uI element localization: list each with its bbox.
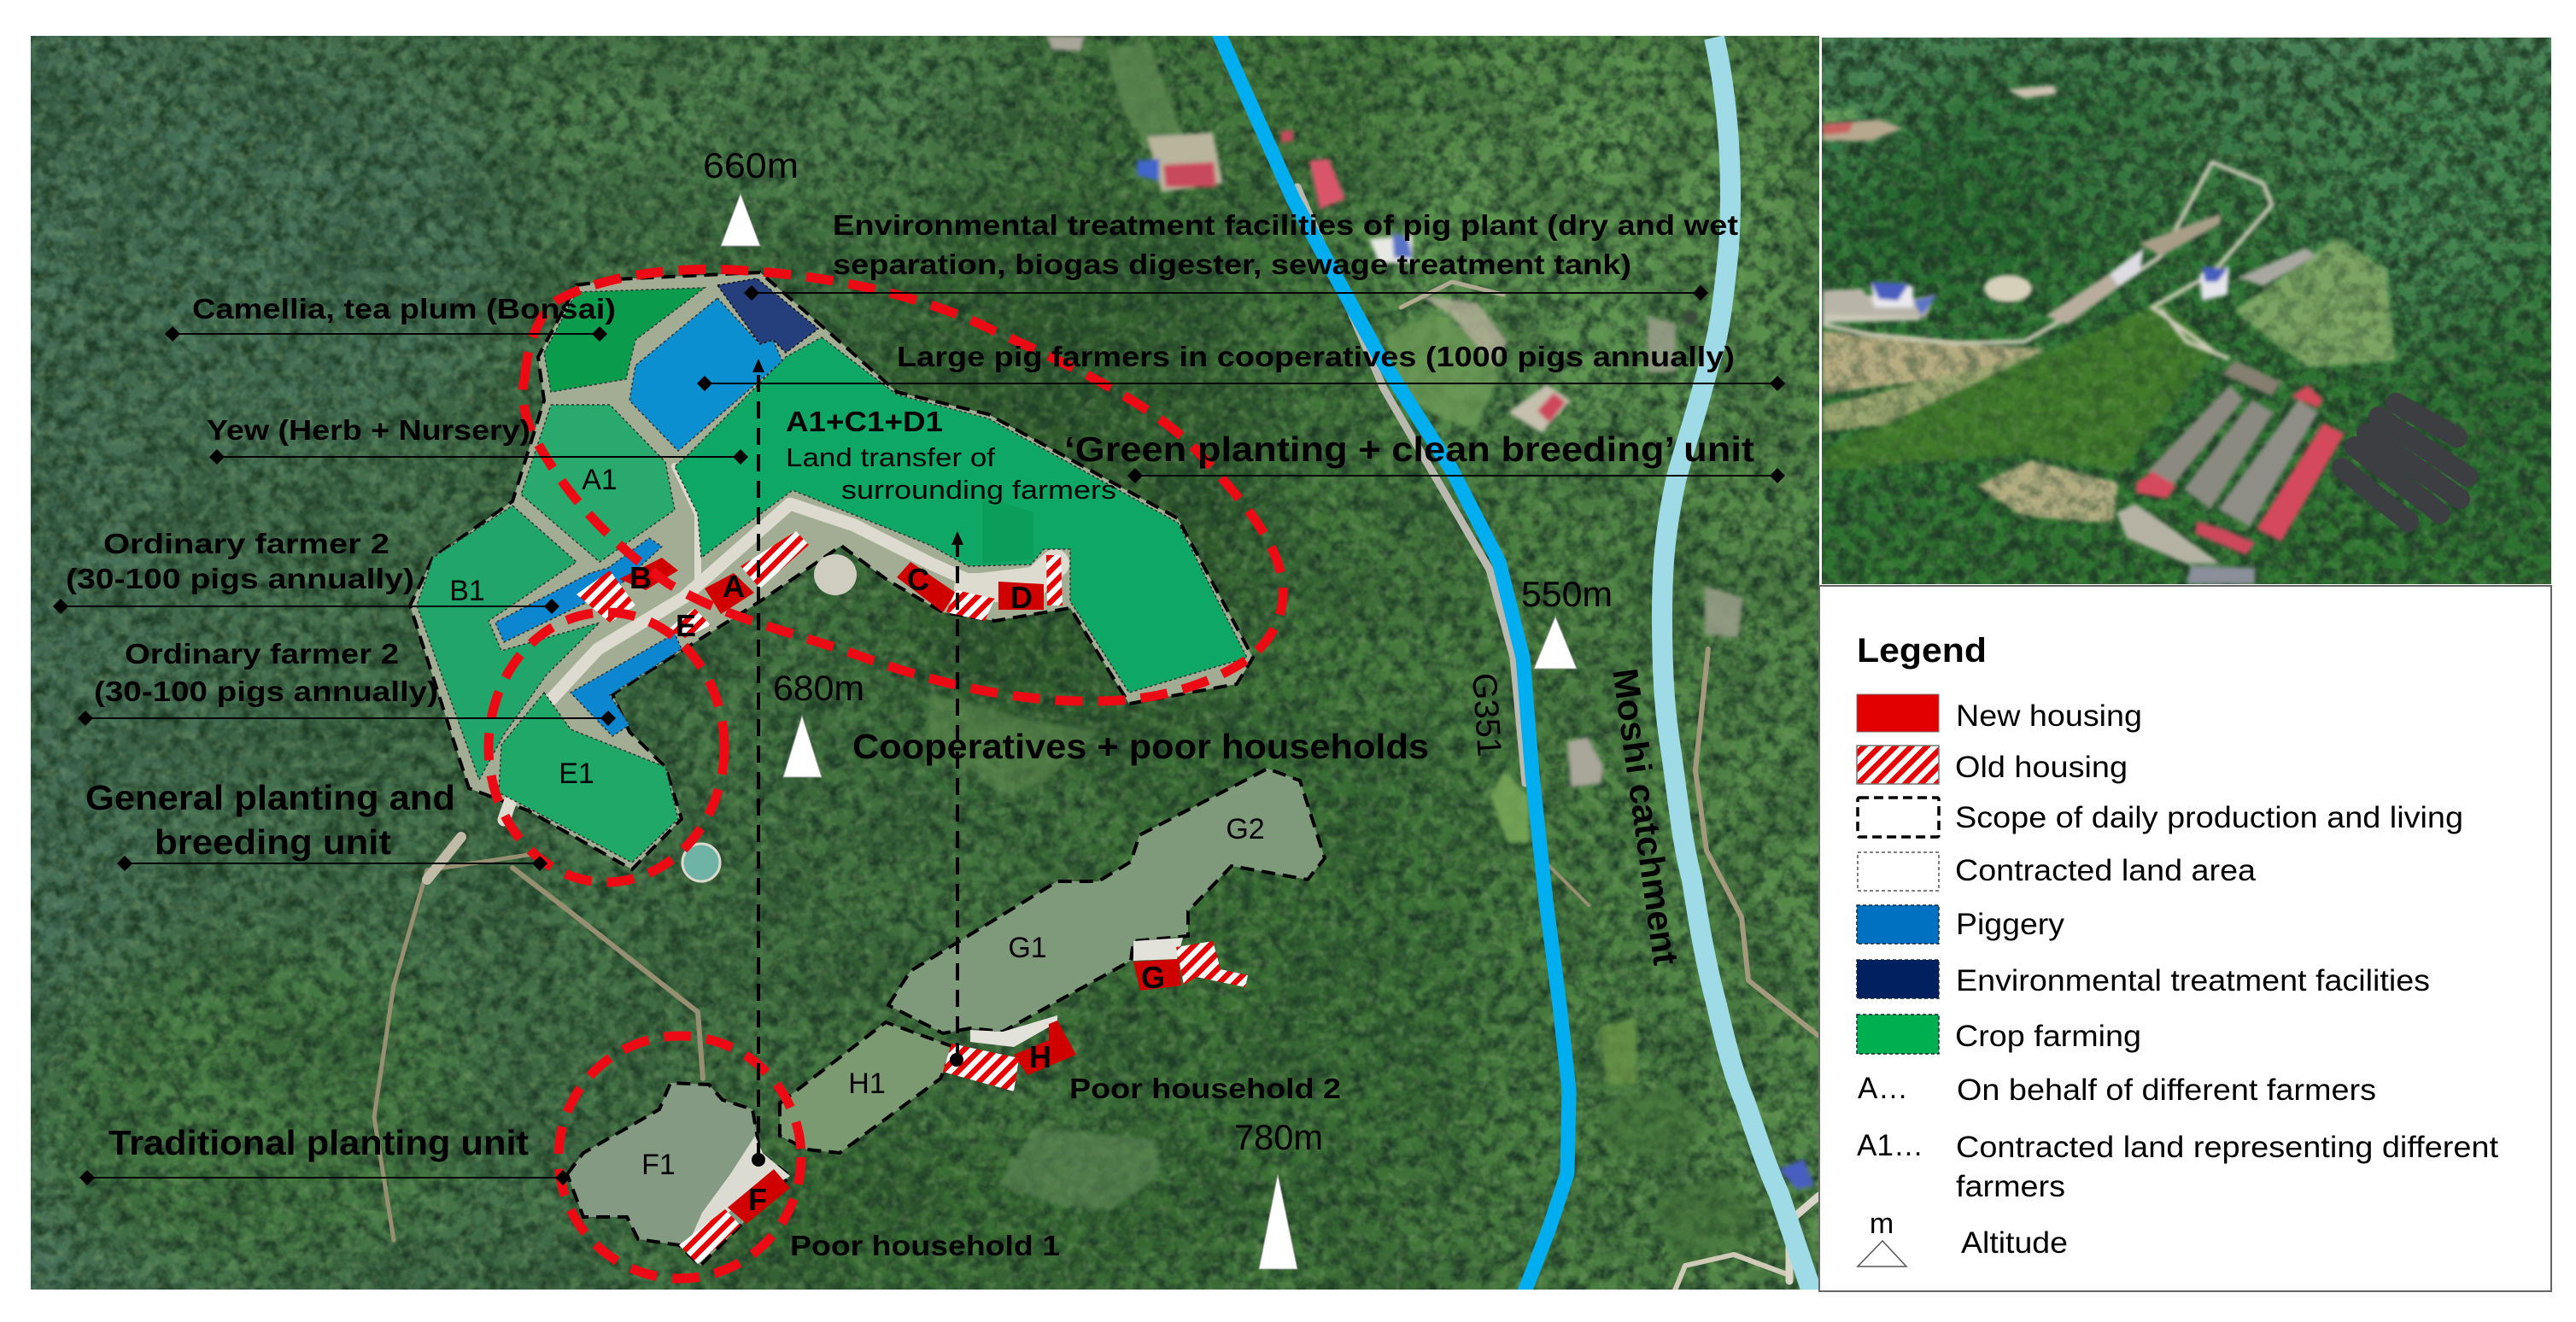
panel: legend [1819, 586, 2551, 1291]
old housing: C [946, 590, 995, 621]
altitude marker: 660m: 660m [703, 145, 799, 185]
field: camellia, tea plum [544, 288, 705, 392]
label: environmental treatment facilities [833, 209, 1738, 280]
photo fields [1823, 109, 2396, 522]
altitude marker: 780m [1234, 1117, 1323, 1269]
leader lines with diamond ends [53, 285, 1785, 1185]
label: ordinary farmer 2: Ordinary farmer 2 [125, 638, 399, 670]
heading: traditional planting unit: Traditional planting unit [108, 1123, 529, 1162]
farmer letters on housing: G [1141, 960, 1165, 995]
Moshi catchment stream [1662, 38, 1812, 1294]
scope and land: tea fields G1 G2 [888, 769, 1325, 1033]
altitude marker: 550m [1521, 574, 1613, 669]
farmer letters on housing [629, 560, 1165, 1217]
label: A1+C1+D1 land transfer: A1+C1+D1 [786, 406, 943, 437]
yard beside G [1133, 938, 1183, 961]
altitude marker: 680m [773, 668, 864, 777]
farmer letters on housing: A [723, 569, 745, 604]
contracted land codes: G1 [1008, 932, 1047, 964]
label: A1+C1+D1 land transfer [786, 406, 1116, 505]
legend item: contracted land code: farmers [1956, 1170, 2065, 1203]
label: environmental treatment facilities: separation, biogas digester, sewage treatment tank) [833, 249, 1631, 280]
forest background [31, 26, 1819, 1290]
farmer letters on housing: E [676, 608, 696, 643]
legend item: contracted land code [1857, 1129, 2498, 1203]
piggery: ordinary farmer 1 [495, 538, 662, 642]
altitude marker: 780m: 780m [1234, 1117, 1323, 1157]
label: camellia: Camellia, tea plum (Bonsai) [192, 293, 616, 325]
label: poor household 2: Poor household 2 [1069, 1073, 1341, 1104]
legend item: scope of daily production and living: Scope of daily production and living [1955, 801, 2463, 834]
legend item: old housing: Old housing [1955, 751, 2128, 784]
arrow: link from household F to A1+C1+D1 [752, 359, 765, 1167]
panel: aerial map [31, 26, 1819, 1294]
legend title: Legend [1857, 632, 1987, 670]
legend item: altitude: m [1870, 1208, 1894, 1240]
label: ordinary farmer 1: (30-100 pigs annually) [66, 563, 414, 594]
old housing: H [943, 1044, 1019, 1091]
piggery: large pig farm [629, 298, 782, 451]
legend item: altitude [1858, 1208, 2068, 1266]
label: Moshi catchment: Moshi catchment [1605, 666, 1686, 968]
heading: general planting and breeding unit: breeding unit [155, 822, 391, 862]
red dashed ellipse: green planting + clean breeding unit [523, 269, 1283, 701]
arrow: link from household H to A1+C1+D1 [950, 531, 963, 1067]
new housing: G [1133, 959, 1181, 991]
piggery: ordinary farmer 2 [571, 634, 682, 736]
old housing: B [577, 570, 635, 623]
label: ordinary farmer 2: (30-100 pigs annually) [94, 676, 438, 707]
farmer letters on housing: D [1010, 580, 1033, 615]
legend item: contracted land code: Contracted land representing different [1956, 1131, 2498, 1164]
legend item: crop farming [1857, 1015, 2141, 1054]
photo buildings and roads [1823, 85, 2345, 584]
landscape patches, buildings and roads [374, 36, 1819, 1290]
label: large pig farmers: Large pig farmers in cooperatives (1000 pigs annually) [897, 341, 1735, 372]
environmental treatment facilities [717, 278, 818, 353]
field: A1 [521, 405, 675, 562]
roads inside the upper site [504, 466, 1055, 820]
heading: general planting and breeding unit [85, 778, 455, 862]
red dashed circle: traditional planting unit [559, 1036, 801, 1278]
contracted land codes: G2 [1226, 813, 1265, 845]
label: A1+C1+D1 land transfer: surrounding farmers [841, 475, 1116, 505]
new housing: A [705, 573, 754, 614]
legend item: contracted land area [1858, 852, 2257, 891]
pond [682, 844, 720, 881]
field shading in A1+C1+D1 [982, 495, 1033, 564]
legend item: new housing [1857, 694, 2142, 733]
yard beside H [970, 1015, 1057, 1047]
contracted land codes: H1 [848, 1068, 886, 1100]
altitude marker: 550m: 550m [1521, 574, 1613, 614]
old housing: D [1046, 555, 1063, 605]
heading: green planting + clean breeding unit: ‘Green planting + clean breeding’ unit [1064, 430, 1754, 469]
legend item: scope of daily production and living [1858, 798, 2463, 837]
scope and land: tea field H1 [780, 1022, 954, 1153]
contracted land codes: B1 [449, 575, 485, 607]
altitude marker: 680m: 680m [773, 668, 864, 708]
contracted land codes [449, 464, 1265, 1181]
legend item: piggery [1857, 905, 2065, 944]
label: ordinary farmer 2 [94, 638, 438, 707]
new housing: C [897, 562, 956, 612]
legend item: farmer code: On behalf of different farmers [1957, 1073, 2376, 1107]
legend item: environmental treatment facilities [1857, 960, 2430, 998]
scope and land: tea field F1 [567, 1083, 790, 1266]
red dashed circle: general planting and breeding unit [489, 612, 724, 882]
dome [814, 554, 857, 595]
contracted land codes: A1 [582, 464, 618, 496]
panel: aerial photograph [1822, 38, 2562, 584]
heading: general planting and breeding unit: General planting and [85, 778, 455, 817]
old housing: A [741, 531, 809, 588]
new housing: H [1014, 1021, 1076, 1075]
label: A1+C1+D1 land transfer: Land transfer of [786, 442, 995, 472]
old housing: F [679, 1209, 741, 1264]
legend item: crop farming: Crop farming [1955, 1020, 2141, 1053]
label: ordinary farmer 1: Ordinary farmer 2 [103, 528, 389, 559]
contracted land codes: F1 [641, 1149, 676, 1181]
contracted land codes: E1 [559, 758, 594, 790]
legend item: altitude: Altitude [1961, 1226, 2068, 1260]
new housing: D [998, 582, 1044, 610]
scope of daily production: upper site outline [410, 272, 1253, 869]
legend item: farmer code: A… [1858, 1072, 1908, 1105]
yard beside F [688, 1136, 790, 1243]
legend item: old housing [1857, 746, 2128, 784]
farmer letters on housing: B [629, 560, 652, 595]
farmer letters on housing: H [1029, 1039, 1051, 1074]
road G351 [1219, 33, 1569, 1294]
label: poor household 1: Poor household 1 [790, 1230, 1060, 1261]
heading: cooperatives + poor households: Cooperatives + poor households [852, 727, 1429, 766]
new housing: B [619, 558, 678, 590]
old housing: E [668, 608, 711, 638]
legend item: piggery: Piggery [1956, 908, 2065, 941]
legend item: new housing: New housing [1956, 699, 2142, 733]
label: yew: Yew (Herb + Nursery) [207, 414, 530, 446]
legend item: environmental treatment facilities: Environmental treatment facilities [1956, 964, 2430, 997]
old housing: G [1176, 941, 1248, 987]
new housing: F [728, 1169, 790, 1224]
legend item: contracted land area: Contracted land area [1955, 854, 2257, 887]
label: environmental treatment facilities: Environmental treatment facilities of pig plant (dry and wet [833, 209, 1738, 241]
label: G351 road: G351 [1465, 672, 1508, 758]
label: ordinary farmer 1 [66, 528, 414, 594]
farmer letters on housing: C [907, 562, 929, 597]
field: A1+C1+D1 land transfer [675, 337, 1247, 693]
field: E1 [499, 693, 678, 863]
legend item: contracted land code: A1… [1857, 1129, 1923, 1162]
field: B1 [417, 506, 600, 780]
farmer letters on housing: F [748, 1182, 767, 1217]
altitude marker: 660m [703, 145, 799, 246]
